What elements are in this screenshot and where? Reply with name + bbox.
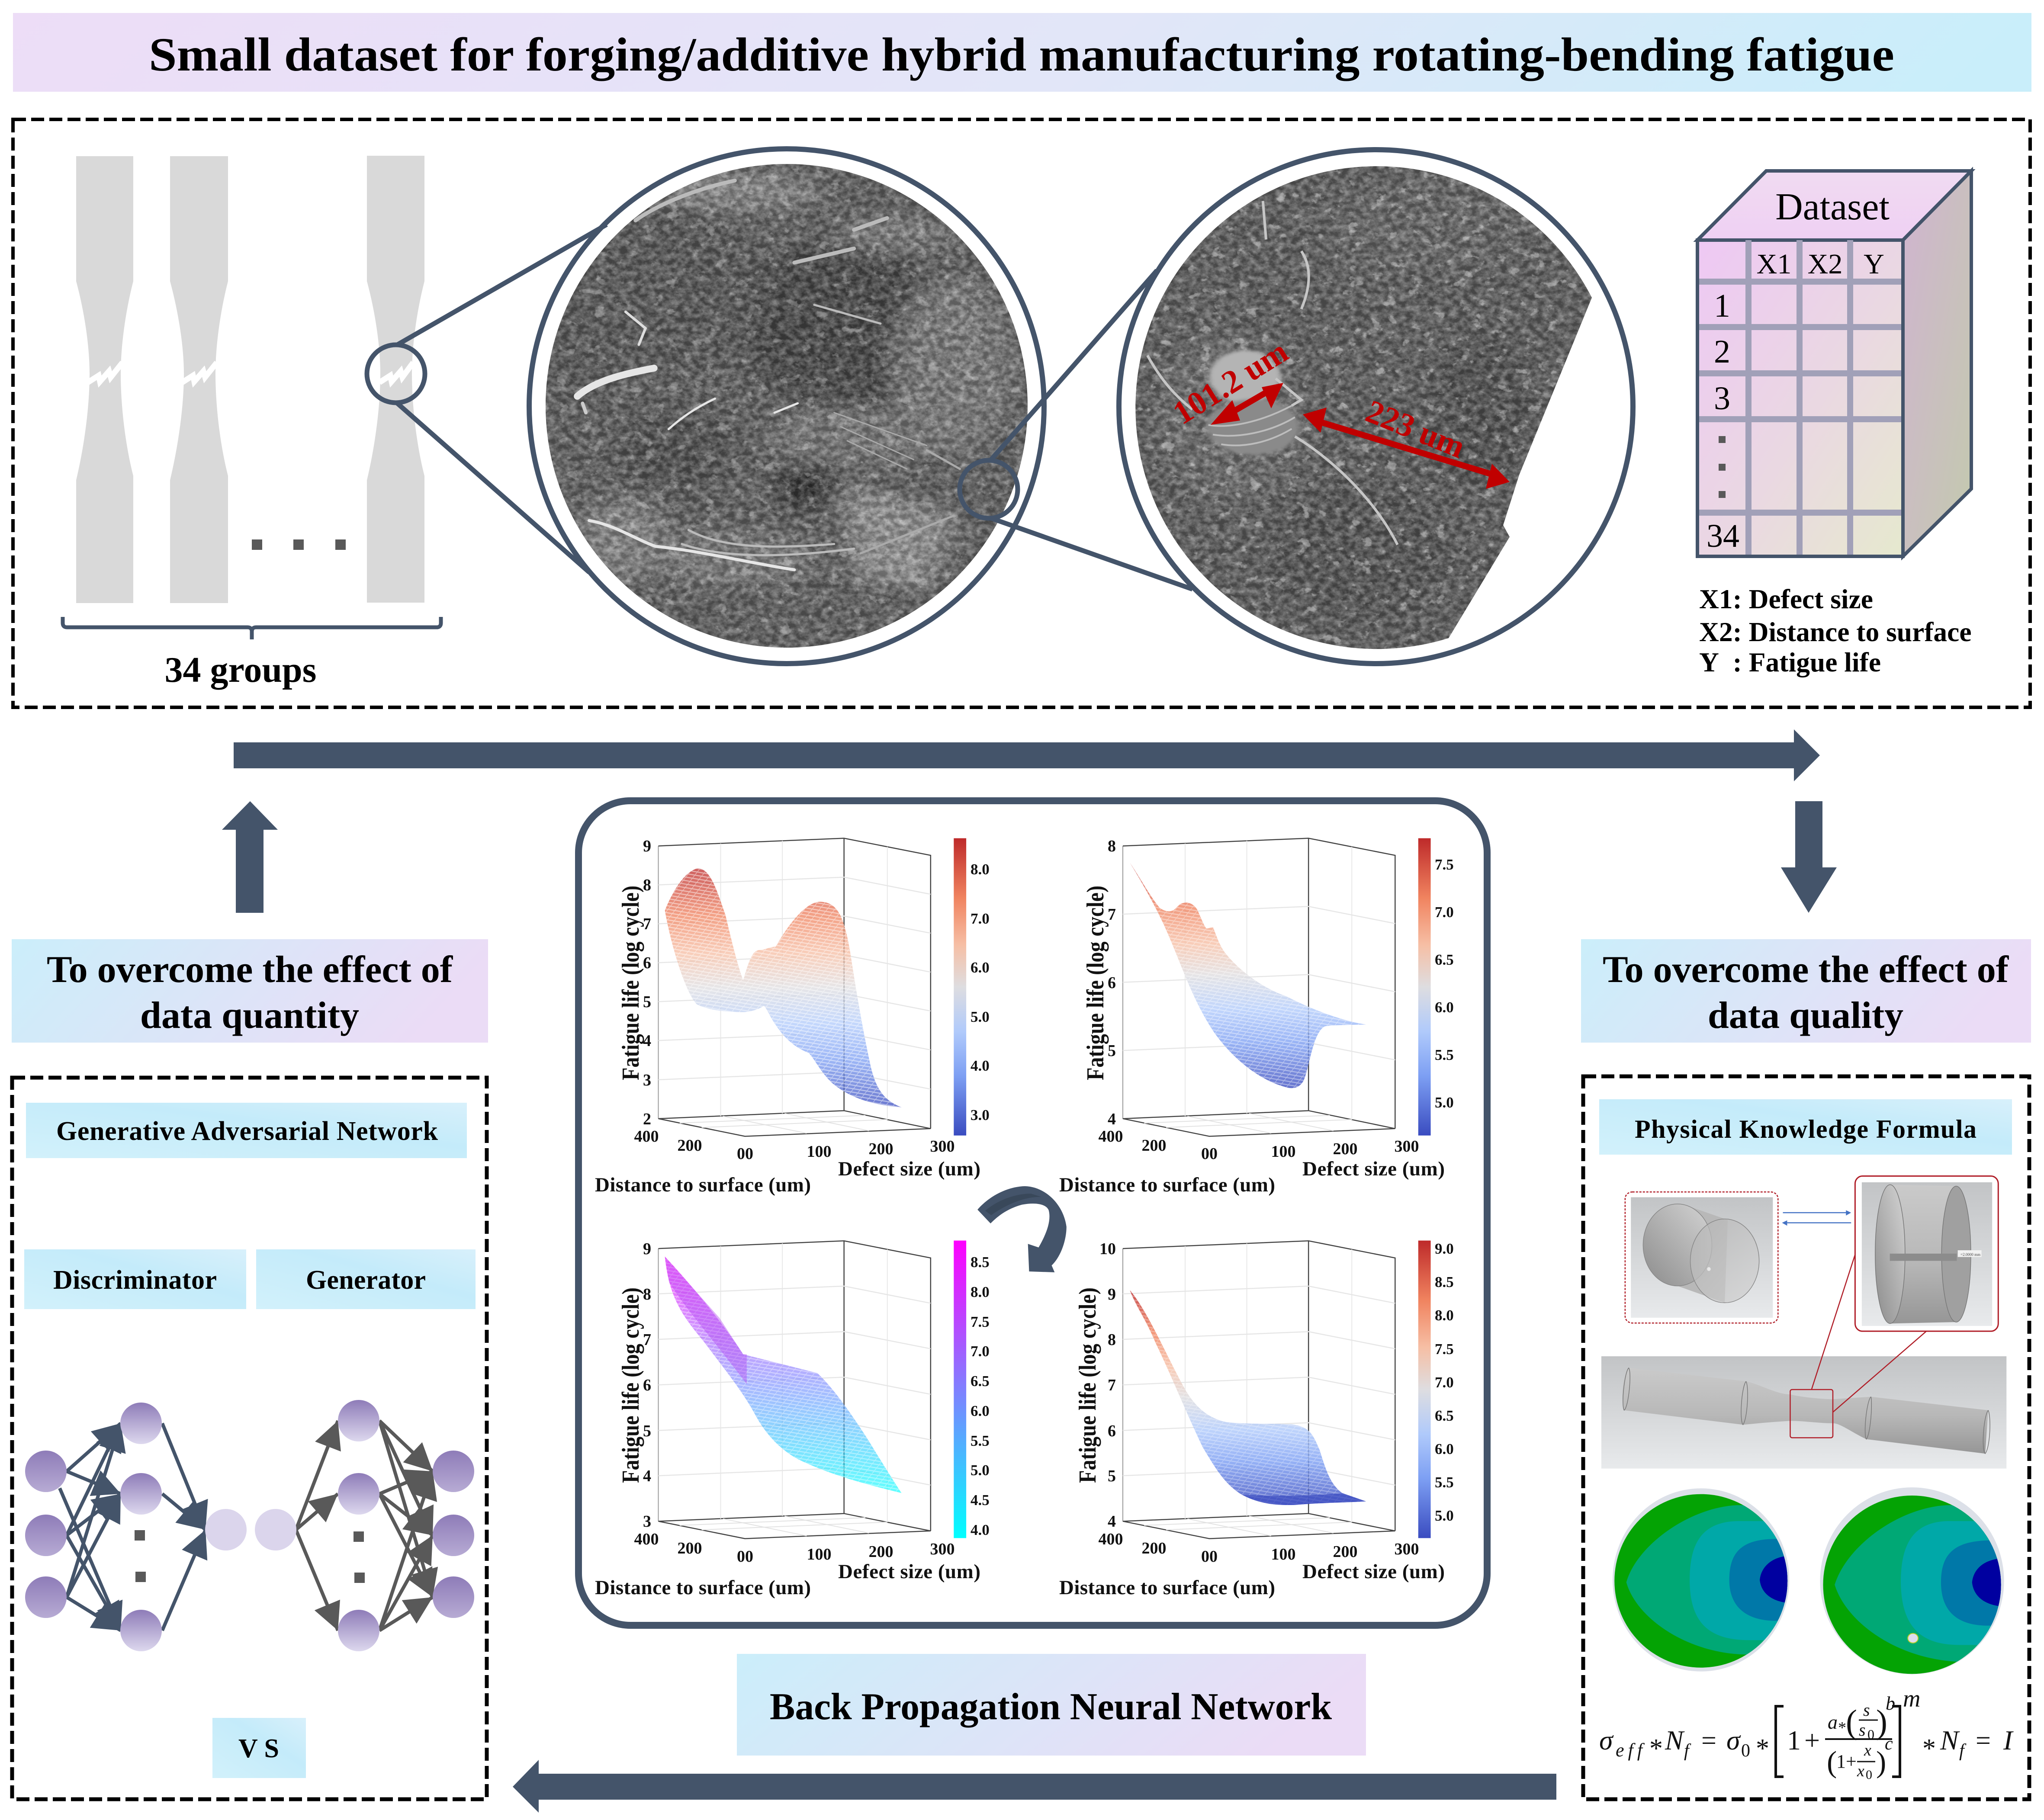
- colorbar ticks: 8.5: [971, 1254, 990, 1271]
- formula: ): [1876, 1703, 1887, 1740]
- y axis ticks: 7: [643, 915, 651, 933]
- formula: ): [1876, 1746, 1886, 1779]
- colorbar ticks: 4.5: [971, 1492, 990, 1509]
- formula: s: [1859, 1720, 1866, 1740]
- y axis ticks: 4: [1108, 1512, 1116, 1531]
- formula: *: [1756, 1734, 1769, 1763]
- colorbar ticks: 5.0: [971, 1008, 990, 1025]
- y axis title: Fatigue life (log cycle): [617, 1287, 644, 1483]
- floor ticks: 200: [1333, 1140, 1358, 1158]
- magnifier circle on specimen: [367, 345, 425, 403]
- label: distance 223 um: 223 um: [1361, 393, 1470, 465]
- y axis ticks: [1099, 1240, 1116, 1531]
- colorbar ticks: 6.0: [971, 959, 990, 976]
- y axis ticks: 5: [1108, 1042, 1116, 1060]
- y axis ticks: 5: [643, 1422, 651, 1440]
- arrow: down on right: [1781, 801, 1837, 913]
- floor ticks: 400: [1098, 1530, 1123, 1548]
- y axis title: Fatigue life (log cycle): [1082, 886, 1109, 1080]
- ellipsis dots: [252, 539, 346, 550]
- floor ticks: 00: [737, 1547, 753, 1566]
- floor ticks: 300: [930, 1540, 955, 1558]
- y axis ticks: 8: [643, 876, 651, 894]
- floor ticks: 200: [869, 1543, 893, 1561]
- y axis ticks: 6: [1108, 1422, 1116, 1440]
- specimen 2: [170, 156, 228, 603]
- formula: (: [1846, 1703, 1857, 1740]
- y axis ticks: 6: [643, 954, 651, 972]
- formula: a: [1828, 1711, 1838, 1733]
- CAD diagrams: [1601, 1176, 2006, 1676]
- colorbar ticks: 7.0: [1435, 904, 1454, 921]
- floor ticks: 300: [930, 1137, 955, 1156]
- fracture surface SEM image: [541, 160, 1030, 653]
- heading: back propagation neural network: Back Propagation Neural Network: [770, 1686, 1332, 1728]
- colorbar ticks: 7.5: [1435, 1341, 1454, 1358]
- box: data quantity: [12, 939, 488, 1043]
- stress contour: with defect: [1820, 1487, 2005, 1676]
- box: data quality: To overcome the effect of: [1603, 949, 2009, 991]
- connector lines: [1812, 1255, 1926, 1412]
- formula: eff: [1616, 1740, 1645, 1761]
- cube side face: [1903, 171, 1971, 556]
- heading: back propagation neural network: [737, 1654, 1366, 1756]
- y axis ticks: 7: [1108, 1376, 1116, 1394]
- floor ticks: 200: [869, 1140, 893, 1158]
- floor ticks: 200: [1141, 1539, 1167, 1557]
- title banner: Small dataset for forging/additive hybrid manufacturing rotating-bending fatigue: [149, 28, 1894, 81]
- floor ticks: [634, 1530, 955, 1566]
- x axis titles: Distance to surface (um): [1059, 1576, 1275, 1599]
- y axis ticks: 6: [1108, 974, 1116, 992]
- colorbar ticks: 6.5: [971, 1373, 990, 1390]
- box: data quality: data quality: [1708, 995, 1903, 1037]
- colorbar ticks: [971, 861, 990, 1123]
- colorbar ticks: 6.5: [1435, 951, 1454, 968]
- panel: physical knowledge formula: [1583, 1076, 2029, 1799]
- table headers and rows: X2: [1808, 248, 1842, 280]
- colorbar ticks: 7.5: [1435, 856, 1454, 873]
- x axis titles: Distance to surface (um): [1059, 1174, 1275, 1196]
- formula: *: [1838, 1719, 1846, 1737]
- formula: c: [1885, 1734, 1893, 1754]
- table ellipsis dots: [1719, 436, 1726, 498]
- formula: 1: [1787, 1725, 1801, 1756]
- floor ticks: 00: [737, 1145, 753, 1163]
- table headers and rows: [1707, 248, 1884, 554]
- stress contour: without defect: [1612, 1488, 1795, 1676]
- colorbar ticks: 8.0: [1435, 1307, 1454, 1324]
- colorbar ticks: 7.0: [971, 910, 990, 927]
- floor ticks: 400: [1098, 1127, 1123, 1146]
- arrows between views: [1782, 1210, 1851, 1226]
- chart: top left surface: [595, 837, 990, 1196]
- heading: physical knowledge formula: Physical Knowledge Formula: [1635, 1115, 1977, 1143]
- colorbar ticks: 8.0: [971, 1284, 990, 1300]
- x axis titles: Defect size (um): [1302, 1560, 1445, 1583]
- colorbar ticks: 8.5: [1435, 1274, 1454, 1290]
- node ellipsis dots: [135, 1530, 365, 1583]
- formula: m: [1903, 1685, 1920, 1712]
- formula: =: [1701, 1726, 1716, 1756]
- colorbar ticks: 4.0: [971, 1521, 990, 1538]
- box: data quality: [1581, 939, 2031, 1043]
- brace: 34 groups: [63, 617, 441, 639]
- x axis titles: [595, 1158, 980, 1196]
- formula: x: [1857, 1762, 1864, 1780]
- colorbar ticks: 4.0: [971, 1057, 990, 1074]
- x axis titles: [1059, 1158, 1445, 1196]
- colorbar ticks: 7.5: [971, 1313, 990, 1330]
- y axis title: Fatigue life (log cycle): [1074, 1287, 1101, 1483]
- floor ticks: 400: [634, 1530, 659, 1548]
- floor ticks: 100: [807, 1143, 832, 1161]
- colorbar ticks: 6.0: [1435, 999, 1454, 1016]
- colorbar ticks: 5.5: [971, 1432, 990, 1449]
- table headers and rows: Y: [1864, 248, 1884, 280]
- panel: dataset acquisition: [13, 119, 2030, 707]
- colorbar ticks: 3.0: [971, 1107, 990, 1123]
- y axis ticks: 5: [1108, 1467, 1116, 1485]
- floor ticks: [634, 1127, 955, 1163]
- y axis ticks: 9: [643, 1240, 651, 1258]
- floor ticks: 400: [634, 1127, 659, 1146]
- floor ticks: [1098, 1530, 1419, 1566]
- label: VS: V S: [238, 1734, 279, 1763]
- defect close-up SEM image: [1125, 160, 1601, 653]
- colorbar ticks: 6.0: [971, 1403, 990, 1419]
- y axis ticks: 9: [1108, 1285, 1116, 1303]
- colorbar ticks: 5.5: [1435, 1474, 1454, 1491]
- colorbar ticks: 7.0: [1435, 1374, 1454, 1391]
- heading: GAN: Generative Adversarial Network: [56, 1117, 438, 1146]
- y axis ticks: [643, 837, 651, 1128]
- y axis ticks: 10: [1099, 1240, 1116, 1258]
- x axis titles: [595, 1560, 980, 1599]
- floor ticks: 200: [678, 1136, 702, 1155]
- specimen render: [1601, 1356, 2006, 1469]
- formula: N: [1940, 1725, 1960, 1756]
- formula: [1599, 1685, 2014, 1782]
- floor ticks: 100: [1271, 1545, 1295, 1563]
- y axis ticks: 5: [643, 993, 651, 1011]
- floor ticks: 00: [1201, 1145, 1218, 1163]
- x axis titles: Distance to surface (um): [595, 1174, 811, 1196]
- chart: bottom left surface: [595, 1240, 990, 1599]
- formula: f: [1959, 1741, 1967, 1761]
- magnifier circle on defect: [960, 460, 1018, 518]
- heading: generator: Generator: [306, 1265, 426, 1295]
- dataset cube: [1697, 171, 1971, 556]
- colorbar ticks: 8.0: [971, 861, 990, 878]
- y axis ticks: 8: [1108, 837, 1116, 855]
- chart: top right surface: [1059, 837, 1454, 1196]
- y axis title: Fatigue life (log cycle): [617, 886, 644, 1080]
- icon: curved arrow: [977, 1186, 1067, 1272]
- y axis ticks: 7: [643, 1331, 651, 1349]
- legend: variables: [1699, 584, 1972, 677]
- formula: *: [1922, 1734, 1936, 1763]
- label: VS: [212, 1718, 306, 1778]
- table headers and rows: 34: [1707, 518, 1739, 554]
- colorbar ticks: 9.0: [1435, 1240, 1454, 1257]
- panel: generative adversarial network: [12, 1078, 487, 1799]
- magnifier lines to defect: [991, 270, 1192, 589]
- colorbar ticks: 5.0: [1435, 1507, 1454, 1524]
- x axis titles: Defect size (um): [1302, 1158, 1445, 1180]
- formula: 1+: [1836, 1751, 1857, 1772]
- measurement label: =2.0000 mm: [1960, 1252, 1980, 1257]
- y axis ticks: [1108, 837, 1116, 1128]
- specimen 3: [367, 156, 424, 603]
- formula: σ: [1726, 1725, 1741, 1756]
- cube label: Dataset: Dataset: [1775, 186, 1890, 228]
- y axis ticks: 4: [1108, 1110, 1116, 1128]
- table headers and rows: 2: [1714, 334, 1730, 370]
- formula: N: [1665, 1725, 1685, 1756]
- y axis ticks: 7: [1108, 905, 1116, 924]
- floor ticks: 300: [1394, 1540, 1419, 1558]
- chart: bottom right surface: [1059, 1240, 1454, 1599]
- heading: GAN: [26, 1103, 467, 1158]
- formula: 0: [1866, 1768, 1872, 1782]
- formula: I: [2003, 1725, 2014, 1756]
- arrow: long top right: [234, 729, 1820, 781]
- formula: b: [1886, 1693, 1895, 1714]
- arrow: distance to surface: [1303, 408, 1510, 489]
- table headers and rows: 1: [1714, 288, 1730, 324]
- colorbar ticks: 6.5: [1435, 1407, 1454, 1424]
- title banner: [13, 13, 2031, 92]
- formula: 0: [1741, 1741, 1750, 1761]
- panel: back propagation surfaces: [578, 801, 1487, 1625]
- heading: discriminator: Discriminator: [53, 1265, 217, 1295]
- magnifier lines from specimen: [397, 225, 607, 572]
- floor ticks: 200: [678, 1539, 702, 1557]
- y axis ticks: 3: [643, 1512, 651, 1531]
- x axis titles: Defect size (um): [838, 1560, 980, 1583]
- y axis ticks: [643, 1240, 651, 1531]
- formula: +: [1804, 1725, 1820, 1756]
- specimen 1: [76, 156, 133, 603]
- colorbar ticks: 7.0: [971, 1343, 990, 1360]
- slit cylinder view: [1855, 1176, 1998, 1331]
- heading: physical knowledge formula: [1599, 1099, 2012, 1155]
- y axis ticks: 6: [643, 1376, 651, 1394]
- y axis ticks: 8: [1108, 1331, 1116, 1349]
- label: defect size 101.2 um: 101.2 um: [1167, 333, 1294, 432]
- x axis titles: [1059, 1560, 1445, 1599]
- formula: 0: [1867, 1727, 1874, 1742]
- colorbar ticks: [971, 1254, 990, 1538]
- label: 34 groups: 34 groups: [165, 650, 316, 690]
- heading: discriminator: [24, 1249, 246, 1309]
- formula: s: [1863, 1700, 1870, 1720]
- y axis ticks: 3: [643, 1071, 651, 1089]
- formula: (: [1827, 1746, 1837, 1779]
- floor ticks: [1098, 1127, 1419, 1163]
- table grid lines: [1699, 240, 1901, 555]
- y axis ticks: 8: [643, 1285, 651, 1303]
- box: data quantity: To overcome the effect of: [47, 949, 453, 991]
- y axis ticks: 4: [643, 1467, 651, 1485]
- colorbar ticks: 5.5: [1435, 1046, 1454, 1063]
- x axis titles: Defect size (um): [838, 1158, 980, 1180]
- colorbar ticks: [1435, 856, 1454, 1111]
- box: data quantity: data quantity: [140, 995, 359, 1037]
- y axis ticks: 9: [643, 837, 651, 855]
- table headers and rows: 3: [1714, 380, 1730, 417]
- floor ticks: 00: [1201, 1547, 1218, 1566]
- legend: variables: X1: Defect size: [1699, 584, 1873, 614]
- formula: f: [1684, 1741, 1691, 1761]
- legend: variables: X2: Distance to surface: [1699, 616, 1972, 647]
- zoom circle on defect: [1119, 150, 1633, 664]
- defect cylinder view: [1625, 1192, 1778, 1323]
- formula: x: [1864, 1741, 1871, 1759]
- arrow: long bottom left: [513, 1760, 1556, 1813]
- heading: generator: [256, 1249, 476, 1309]
- generator arrows: [296, 1421, 433, 1631]
- legend: variables: Y : Fatigue life: [1699, 647, 1881, 677]
- y axis ticks: 2: [643, 1110, 651, 1128]
- floor ticks: 300: [1394, 1137, 1419, 1156]
- colorbar ticks: 6.0: [1435, 1441, 1454, 1457]
- formula: *: [1649, 1734, 1663, 1763]
- floor ticks: 100: [1271, 1143, 1295, 1161]
- cube top face: [1697, 171, 1971, 240]
- network nodes: [25, 1400, 474, 1651]
- colorbar ticks: 5.0: [971, 1462, 990, 1479]
- table headers and rows: X1: [1757, 248, 1791, 280]
- formula: σ: [1599, 1725, 1614, 1756]
- arrow: defect size: [1211, 383, 1283, 425]
- large zoom circle: [529, 149, 1044, 664]
- y axis ticks: 4: [643, 1032, 651, 1050]
- cube front table: [1697, 240, 1903, 556]
- colorbar ticks: [1435, 1240, 1454, 1524]
- formula: =: [1976, 1726, 1991, 1756]
- x axis titles: Distance to surface (um): [595, 1576, 811, 1599]
- colorbar ticks: 5.0: [1435, 1094, 1454, 1111]
- floor ticks: 200: [1141, 1136, 1167, 1155]
- floor ticks: 200: [1333, 1543, 1358, 1561]
- arrow: up on left: [222, 801, 278, 913]
- floor ticks: 100: [807, 1545, 832, 1563]
- discriminator arrows: [60, 1423, 206, 1631]
